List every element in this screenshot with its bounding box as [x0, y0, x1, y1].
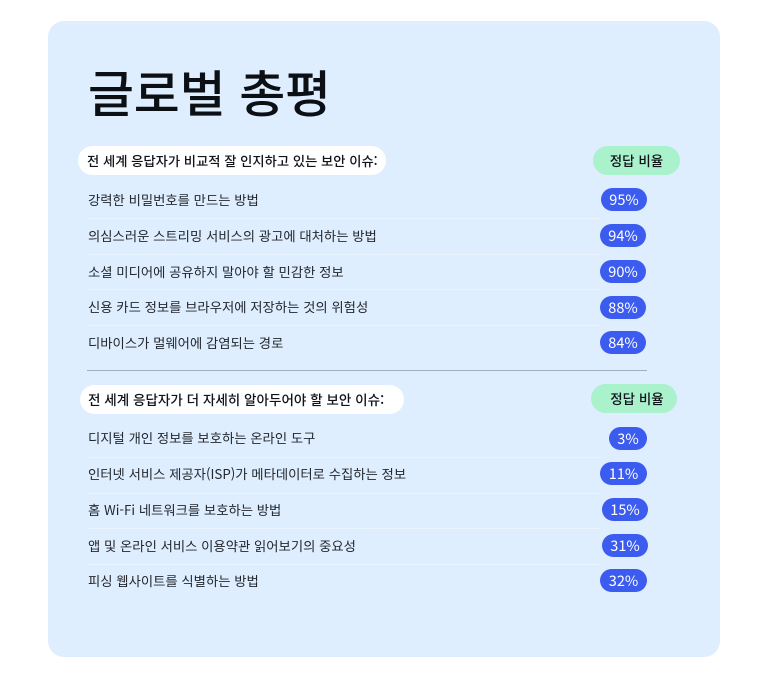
section 1 rate label [593, 146, 680, 175]
row 7 value: 11% [609, 463, 638, 484]
row 8 value [602, 498, 648, 521]
row 6 value [609, 427, 647, 450]
row 1 value [601, 188, 647, 211]
row 7 value [600, 462, 647, 485]
section 2 rate label: 정답 비율 [610, 388, 664, 408]
row 9 label: 앱 및 온라인 서비스 이용약관 읽어보기의 중요성 [88, 536, 356, 555]
row 4 label: 신용 카드 정보를 브라우저에 저장하는 것의 위험성 [88, 297, 368, 316]
row 9 value [602, 534, 648, 557]
row 3 value [600, 260, 646, 283]
row 5 value [600, 331, 646, 354]
section 1 heading [78, 146, 386, 175]
row 3 value: 90% [608, 261, 638, 282]
row 2 value [600, 224, 646, 247]
row 3 label: 소셜 미디어에 공유하지 말아야 할 민감한 정보 [88, 262, 344, 281]
title: 글로벌 총평 [88, 55, 331, 127]
row 6 value: 3% [617, 428, 639, 449]
row 7 label: 인터넷 서비스 제공자(ISP)가 메타데이터로 수집하는 정보 [88, 464, 406, 483]
section 1 heading: 전 세계 응답자가 비교적 잘 인지하고 있는 보안 이슈: [87, 151, 378, 170]
section 2 heading: 전 세계 응답자가 더 자세히 알아두어야 할 보안 이슈: [88, 389, 384, 409]
row 2 value: 94% [608, 225, 638, 246]
row 8 label: 홈 Wi-Fi 네트워크를 보호하는 방법 [88, 500, 281, 519]
row 5 label: 디바이스가 멀웨어에 감염되는 경로 [88, 333, 283, 352]
row 4 value: 88% [608, 297, 638, 318]
row 9 value: 31% [610, 535, 640, 556]
row 2 label: 의심스러운 스트리밍 서비스의 광고에 대처하는 방법 [88, 226, 377, 245]
row 10 label: 피싱 웹사이트를 식별하는 방법 [88, 571, 259, 590]
row 1 label: 강력한 비밀번호를 만드는 방법 [88, 190, 259, 209]
row 5 value: 84% [608, 332, 638, 353]
row 6 label: 디지털 개인 정보를 보호하는 온라인 도구 [88, 428, 315, 447]
row 1 value: 95% [609, 189, 639, 210]
row 4 value [600, 296, 646, 319]
row 10 value: 32% [609, 570, 638, 591]
row 10 value [600, 569, 647, 592]
section 2 heading [80, 385, 404, 414]
row 8 value: 15% [610, 499, 640, 520]
section 2 rate label [591, 384, 677, 413]
section 1 rate label: 정답 비율 [610, 150, 663, 170]
